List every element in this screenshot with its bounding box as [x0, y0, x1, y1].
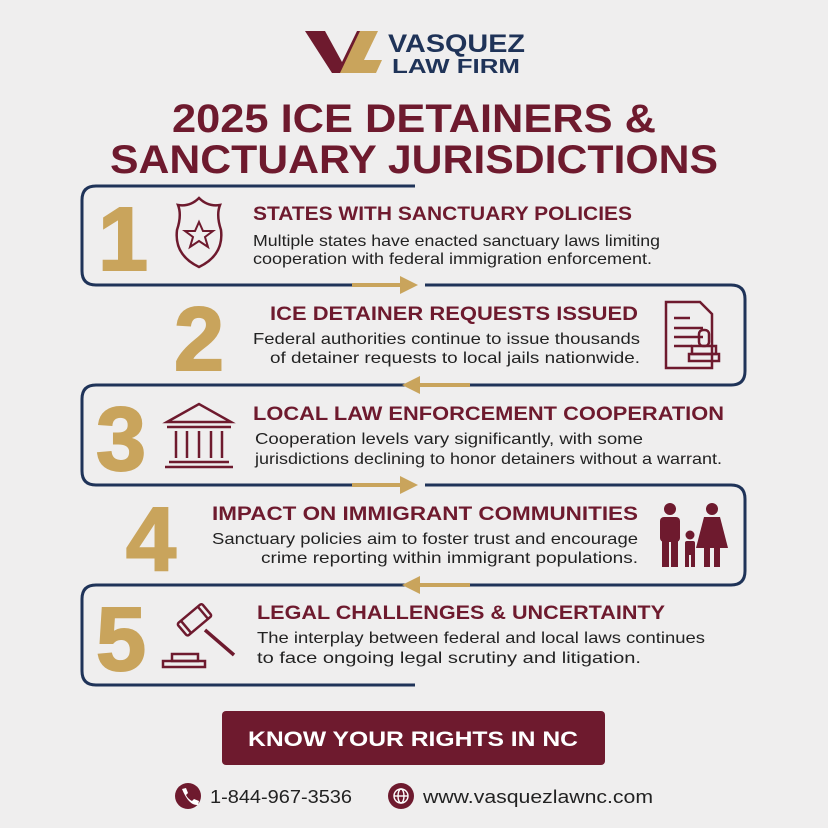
icon: courthouse — [165, 404, 233, 467]
icon: gavel — [163, 603, 234, 667]
numbers: 1 — [98, 190, 148, 290]
numbers: 5 — [96, 590, 146, 690]
panel 1 text: Multiple states have enacted sanctuary laws limiting — [253, 233, 660, 250]
numbers: 4 — [126, 490, 176, 590]
panel 2 text: of detainer requests to local jails nationwide. — [270, 350, 640, 367]
panel 3 text: Cooperation levels vary significantly, with some — [255, 431, 643, 448]
logo — [305, 30, 525, 78]
footer website — [388, 783, 653, 809]
panel 3 text: jurisdictions declining to honor detainers without a warrant. — [254, 451, 722, 468]
serpentine connector path — [82, 186, 745, 685]
panel 4 text: Sanctuary policies aim to foster trust and encourage — [212, 531, 638, 548]
footer phone: 1-844-967-3536 — [210, 787, 352, 807]
icon: document with stamp — [666, 302, 719, 368]
panel 5 text: The interplay between federal and local laws continues — [257, 630, 705, 647]
panel 2 text: ICE DETAINER REQUESTS ISSUED — [270, 304, 638, 325]
panel 5 text: LEGAL CHALLENGES & UNCERTAINTY — [257, 603, 665, 624]
panel 3 text — [253, 404, 724, 468]
panel 3 text: LOCAL LAW ENFORCEMENT COOPERATION — [253, 404, 724, 425]
panel 1 text: STATES WITH SANCTUARY POLICIES — [253, 204, 632, 225]
arrows — [352, 276, 470, 594]
icon: family — [660, 503, 728, 567]
title — [110, 97, 718, 182]
title: 2025 ICE DETAINERS & — [172, 97, 656, 141]
icon: shield — [177, 198, 221, 267]
numbers: 2 — [174, 290, 224, 390]
logo: LAW FIRM — [392, 56, 520, 78]
footer website: www.vasquezlawnc.com — [422, 787, 653, 807]
panel 5 text — [257, 603, 705, 667]
panel 4 text: crime reporting within immigrant populations. — [261, 550, 638, 567]
panel 2 text: Federal authorities continue to issue thousands — [253, 331, 640, 348]
panel 5 text: to face ongoing legal scrutiny and litigation. — [257, 650, 641, 667]
panel 2 text — [253, 304, 640, 367]
panel 4 text: IMPACT ON IMMIGRANT COMMUNITIES — [212, 504, 638, 525]
numbers: 3 — [96, 390, 146, 490]
logo: VASQUEZ — [388, 30, 525, 58]
footer phone — [175, 783, 352, 809]
numbers — [96, 190, 224, 690]
panel 1 text: cooperation with federal immigration enforcement. — [253, 251, 652, 268]
panel 1 text — [253, 204, 660, 268]
button: KNOW YOUR RIGHTS IN NC — [248, 728, 578, 751]
panel 4 text — [212, 504, 638, 567]
title: SANCTUARY JURISDICTIONS — [110, 138, 718, 182]
button — [222, 711, 605, 765]
